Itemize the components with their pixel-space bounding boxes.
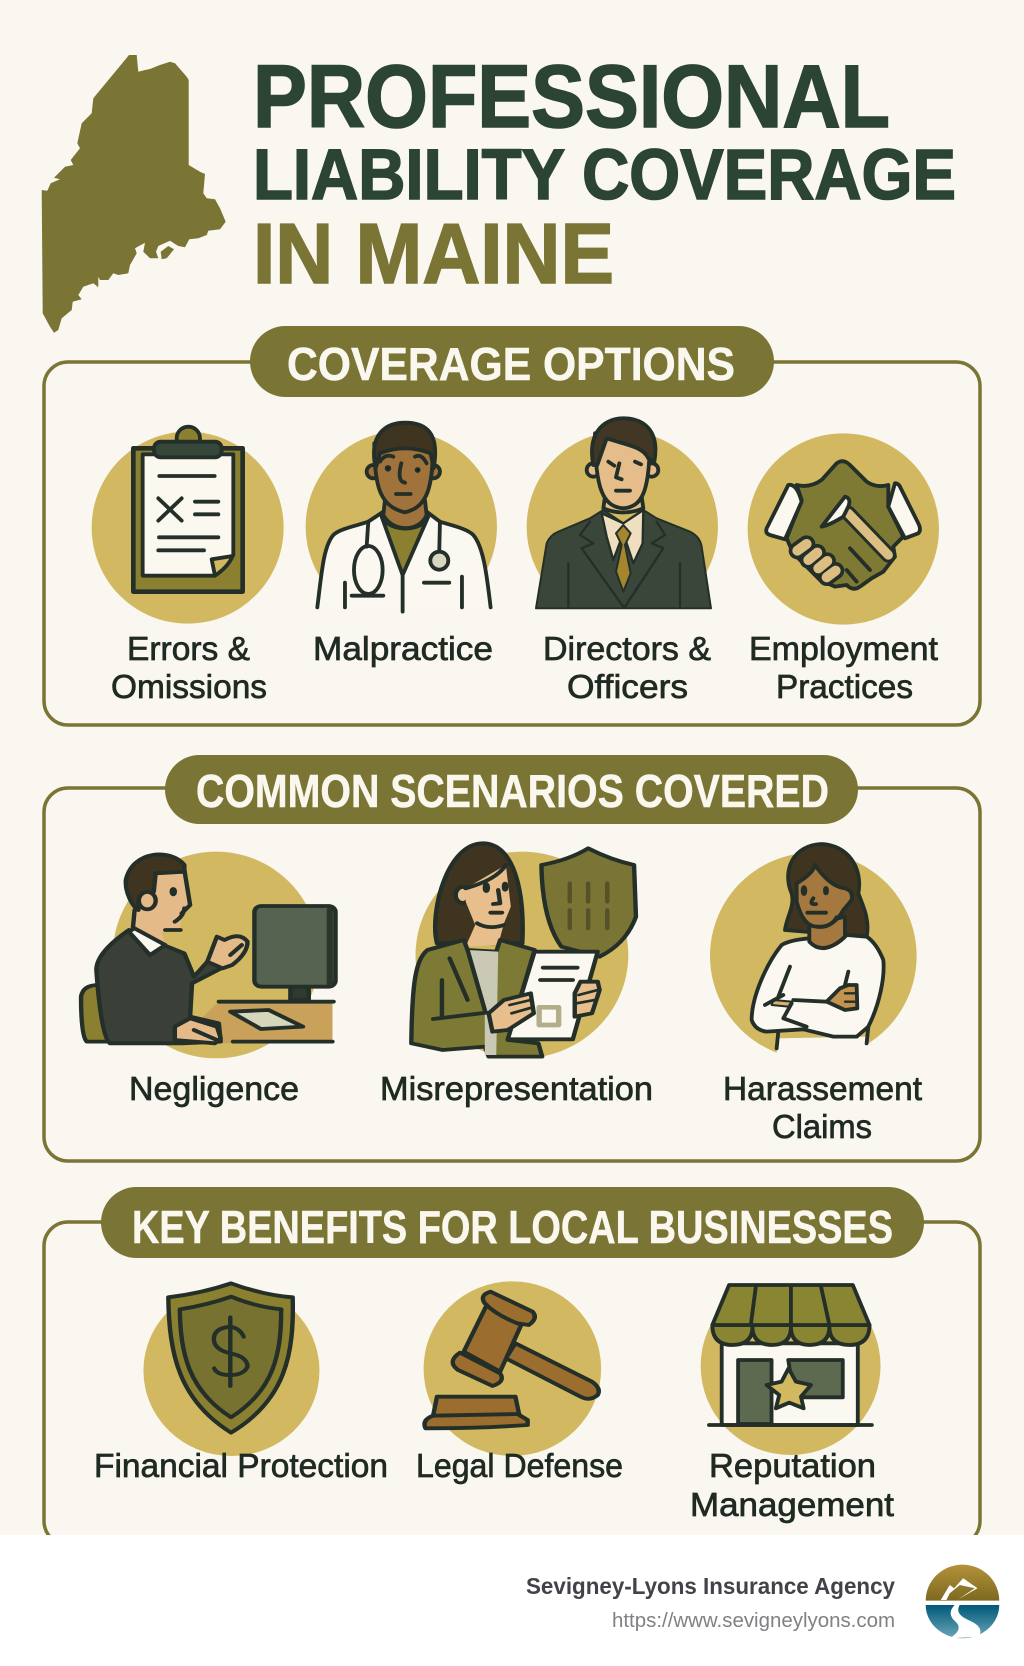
icon: negligence, man at desk (81, 852, 336, 1058)
label: Errors & Omissions: Omissions (111, 668, 267, 705)
panel: key benefits for local businesses (44, 1187, 980, 1545)
label: Employment Practices: Practices (776, 668, 913, 705)
title: PROFESSIONAL (253, 46, 890, 146)
heading: common scenarios covered (165, 755, 858, 824)
label: Malpractice: Malpractice (313, 630, 493, 667)
label: Harassement Claims: Claims (772, 1108, 872, 1145)
panel: coverage options (44, 326, 980, 725)
label: Reputation Management: Management (690, 1486, 894, 1523)
label: Directors & Officers (543, 630, 711, 705)
heading: coverage options (250, 326, 774, 397)
icon: director in suit (523, 418, 723, 625)
label: Employment Practices: Employment (749, 630, 938, 667)
icon: clipboard (92, 427, 284, 624)
label: Harassement Claims: Harassement (723, 1070, 922, 1107)
label: Reputation Management (690, 1447, 894, 1523)
label: Directors & Officers: Directors & (543, 630, 711, 667)
icon: gavel (424, 1281, 601, 1456)
label: Negligence: Negligence (129, 1070, 299, 1107)
label: Reputation Management: Reputation (709, 1447, 876, 1484)
icon: Maine state silhouette (42, 55, 226, 333)
agency url: https://www.sevigneylyons.com (612, 1610, 895, 1632)
label: Directors & Officers: Officers (567, 668, 688, 705)
icon: agency logo (926, 1565, 999, 1638)
icon: shield with dollar sign (143, 1283, 319, 1456)
footer (0, 1535, 1024, 1666)
title (253, 46, 956, 302)
icon: handshake (748, 433, 939, 625)
heading: key benefits (101, 1187, 924, 1258)
label: Errors & Omissions: Errors & (127, 630, 250, 667)
title: LIABILITY COVERAGE (253, 136, 956, 215)
panel: common scenarios covered (44, 755, 980, 1161)
icon: doctor (303, 423, 500, 625)
agency name: Sevigney-Lyons Insurance Agency (526, 1573, 895, 1599)
heading: common scenarios covered: COMMON SCENARIOS COVERED (196, 765, 829, 817)
icon: misrepresentation, woman with document and shield (411, 843, 636, 1058)
label: Legal Defense: Legal Defense (416, 1447, 623, 1484)
label: Harassement Claims (723, 1070, 922, 1145)
label: Misrepresentation: Misrepresentation (380, 1070, 653, 1107)
heading: coverage options: COVERAGE OPTIONS (287, 338, 735, 390)
title: IN MAINE (253, 207, 614, 302)
icon: storefront with star (697, 1273, 885, 1455)
label: Financial Protection: Financial Protection (94, 1447, 388, 1484)
label: Errors & Omissions (111, 630, 267, 705)
icon: harassment claims, woman with crossed arms (710, 844, 917, 1063)
label: Employment Practices (749, 630, 938, 705)
